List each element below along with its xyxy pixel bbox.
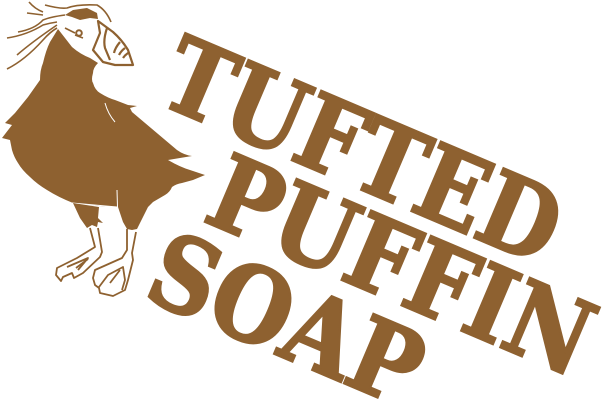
head cap: [65, 8, 98, 20]
left leg: [73, 203, 103, 228]
wordmark: [131, 14, 603, 401]
puffin body: [2, 29, 205, 230]
icon: tufted puffin: [2, 2, 205, 296]
white body highlights: [72, 103, 118, 207]
eye stripe: [65, 28, 83, 38]
right foot: [93, 229, 136, 296]
head outline and beak: [93, 21, 133, 65]
left foot: [56, 228, 102, 281]
tuft feathers: [7, 2, 111, 69]
eye: [76, 30, 82, 36]
